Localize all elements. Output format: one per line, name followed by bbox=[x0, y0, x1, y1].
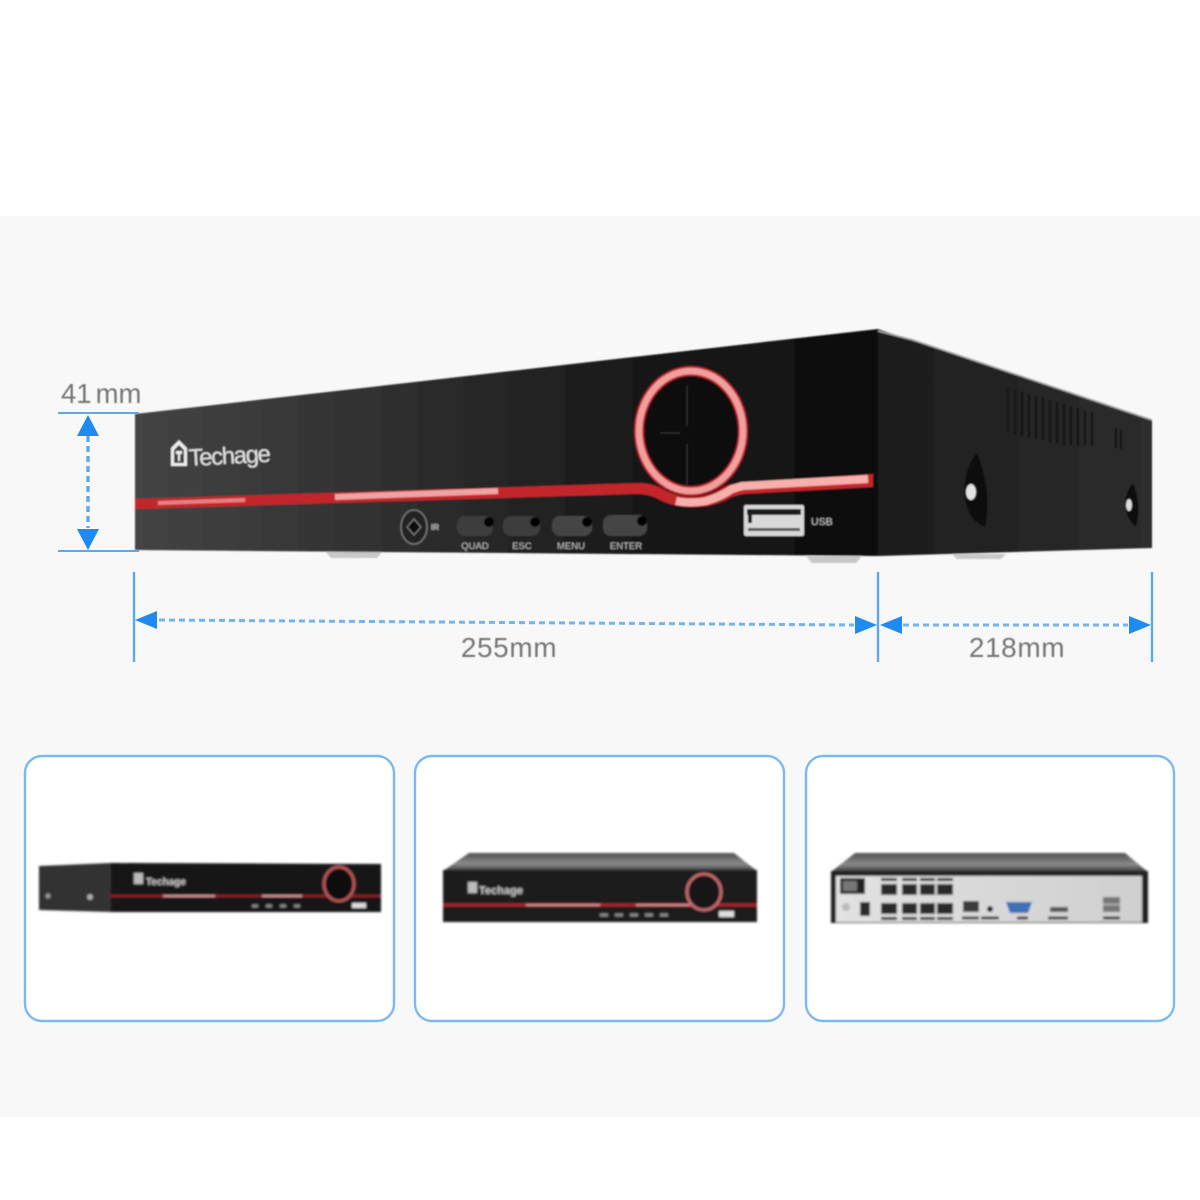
dimension: width 255mm: 255mm bbox=[461, 632, 557, 663]
front buttons bbox=[457, 515, 647, 536]
side screw left bbox=[964, 453, 987, 527]
button labels: MENU bbox=[557, 541, 585, 552]
side screw right bbox=[1125, 483, 1138, 527]
button labels bbox=[461, 541, 642, 552]
button labels: QUAD bbox=[461, 541, 489, 552]
dimension: height 41mm: 41mm bbox=[61, 378, 141, 409]
USB port: USB bbox=[811, 516, 833, 528]
card: rear view bbox=[806, 756, 1174, 1021]
recorder thumbnail: side angle bbox=[39, 863, 381, 912]
LAN, audio, VGA, HDMI, USB ports bbox=[962, 897, 1120, 918]
recorder thumbnail: front bbox=[443, 853, 757, 922]
power ring bbox=[639, 371, 743, 491]
dimension: depth 218mm: 218mm bbox=[969, 632, 1065, 663]
ethernet ports bbox=[881, 878, 953, 920]
recorder thumbnail: side angle: Techage bbox=[146, 877, 186, 888]
recorder thumbnail: front: Techage bbox=[479, 885, 523, 897]
brand logo: Techage bbox=[188, 441, 271, 472]
dimension: height 41mm bbox=[58, 378, 141, 551]
button labels: ENTER bbox=[610, 541, 642, 552]
dimension: depth 218mm bbox=[880, 572, 1152, 663]
recorder thumbnail: rear ports bbox=[831, 853, 1148, 923]
button labels: ESC bbox=[512, 541, 532, 552]
card: side angle view bbox=[25, 756, 394, 1021]
background panel bbox=[0, 216, 1200, 1117]
rubber feet bbox=[325, 551, 1006, 563]
main product: NVR recorder bbox=[135, 329, 1152, 563]
IR receiver: IR bbox=[431, 523, 439, 532]
dimension: width 255mm bbox=[134, 572, 878, 663]
red light bar bbox=[135, 474, 873, 509]
vent slots bbox=[1008, 388, 1121, 449]
front panel bbox=[135, 329, 878, 556]
USB port bbox=[744, 505, 833, 536]
card: front view bbox=[415, 756, 784, 1021]
IR receiver bbox=[401, 510, 439, 544]
power supply block bbox=[840, 878, 870, 916]
side panel bbox=[878, 329, 1152, 556]
